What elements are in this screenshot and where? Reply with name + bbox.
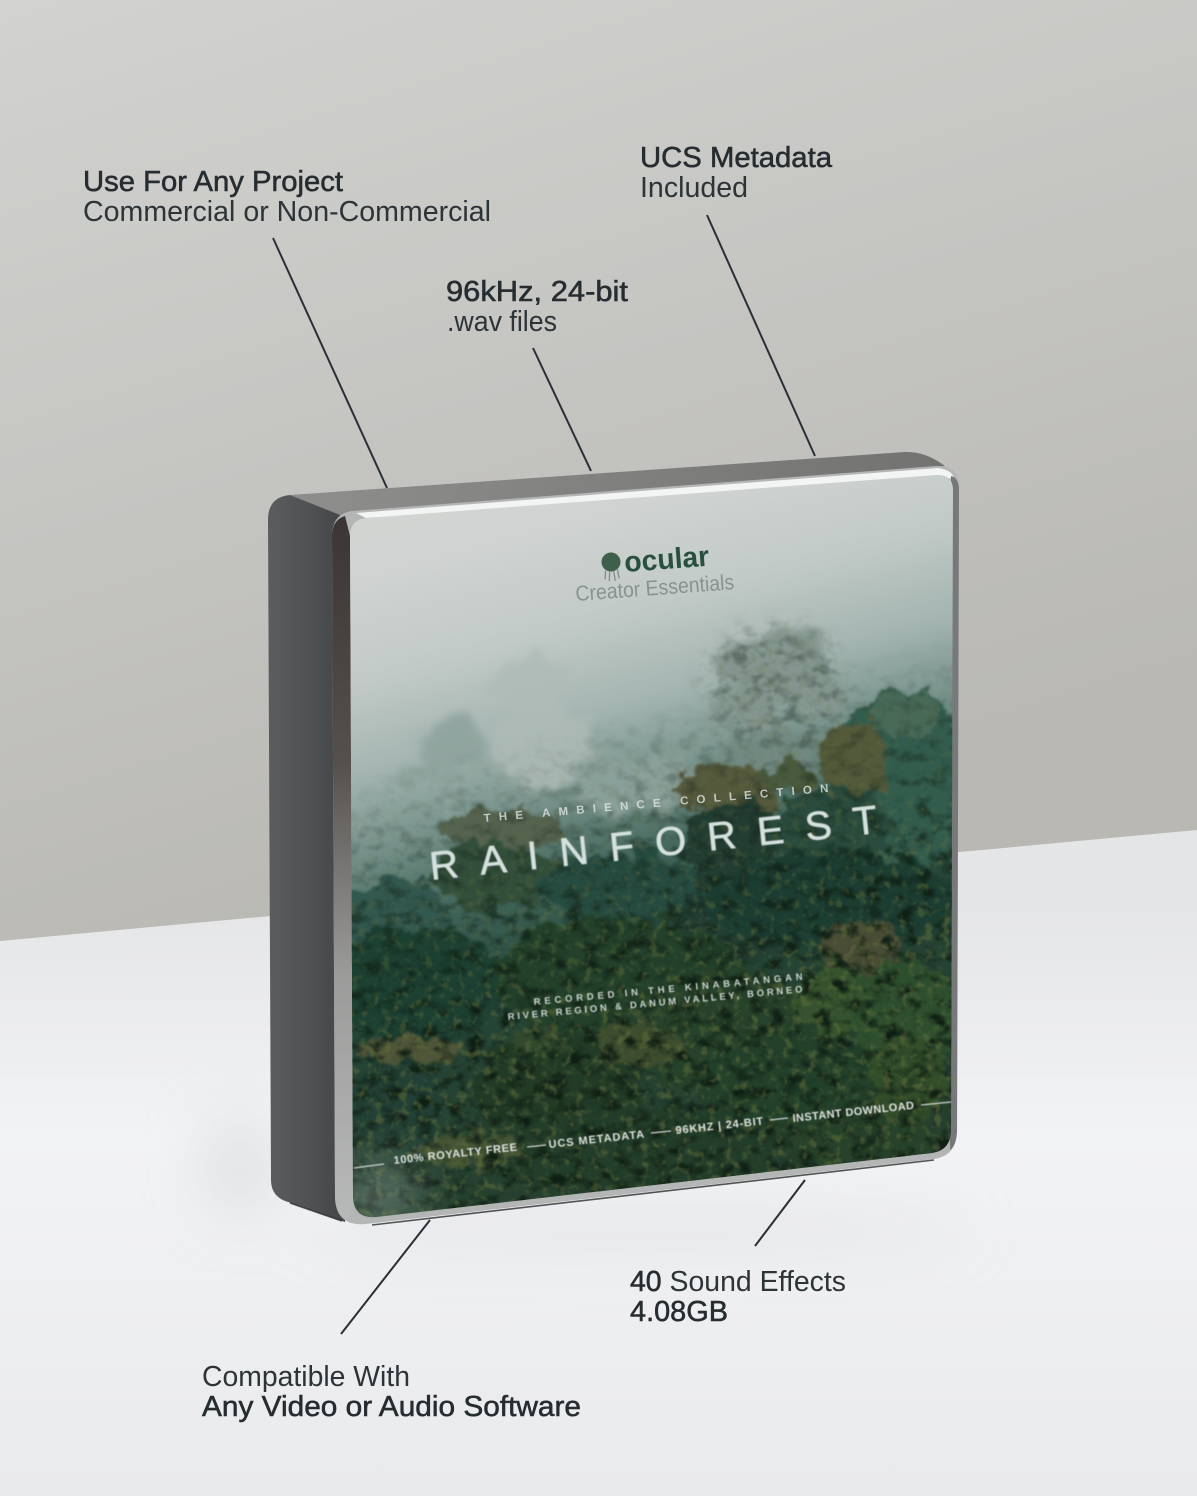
callout: sound effects count and size — [630, 1266, 846, 1328]
cover artwork — [335, 460, 977, 1230]
frame left edge — [332, 516, 353, 1220]
near canopy layer — [335, 917, 965, 1194]
box top face — [290, 452, 945, 518]
product box — [268, 452, 977, 1230]
feature strip — [354, 1100, 951, 1168]
frame top highlight — [356, 468, 954, 518]
callout: UCS metadata: UCS Metadata — [640, 142, 832, 174]
callout: compatibility: Any Video or Audio Software — [202, 1391, 581, 1423]
callout: compatibility — [202, 1361, 581, 1423]
foliage texture — [352, 616, 952, 1218]
wall background — [0, 0, 1197, 960]
fog in lower corner — [348, 1171, 412, 1219]
callout: audio format: .wav files — [447, 306, 557, 338]
callout: use for any project: Use For Any Project — [83, 166, 343, 198]
feature strip: 100% ROYALTY FREE — [393, 1142, 518, 1167]
box shadow on floor — [200, 1115, 970, 1242]
callout: use for any project — [83, 166, 491, 228]
callout: UCS metadata: Included — [640, 172, 748, 204]
feature strip: 96KHZ | 24-BIT — [675, 1116, 764, 1137]
callout: sound effects count and size: 40 Sound Effects — [630, 1266, 846, 1298]
recording location: RIVER REGION & DANUM VALLEY, BORNEO — [507, 984, 803, 1023]
distant misty trees — [394, 632, 850, 820]
floor — [0, 830, 1197, 1496]
frame right edge — [950, 476, 959, 1150]
callout: sound effects count and size: 4.08GB — [630, 1296, 728, 1328]
tagline: Creator Essentials — [575, 570, 735, 606]
callout: use for any project: Commercial or Non-Commercial — [83, 196, 491, 228]
callout leader lines — [273, 215, 815, 1334]
callout: audio format: 96kHz, 24-bit — [446, 276, 628, 308]
mid forest layer — [340, 690, 977, 973]
metal frame — [332, 466, 959, 1224]
title: RAINFOREST — [427, 798, 879, 889]
callout: compatibility: Compatible With — [202, 1361, 410, 1393]
wordmark: ocular — [623, 541, 710, 579]
callout: audio format — [446, 276, 628, 338]
feature strip: UCS METADATA — [548, 1129, 645, 1151]
logo — [575, 541, 735, 606]
recording location: RECORDED IN THE KINABATANGAN — [533, 972, 803, 1008]
icon: jellyfish — [601, 552, 622, 582]
contact shadow line — [290, 1160, 934, 1225]
feature strip: INSTANT DOWNLOAD — [792, 1100, 915, 1125]
callout: UCS metadata — [640, 142, 832, 204]
box left side — [268, 495, 345, 1222]
collection subtitle: THE AMBIENCE COLLECTION — [483, 783, 829, 825]
